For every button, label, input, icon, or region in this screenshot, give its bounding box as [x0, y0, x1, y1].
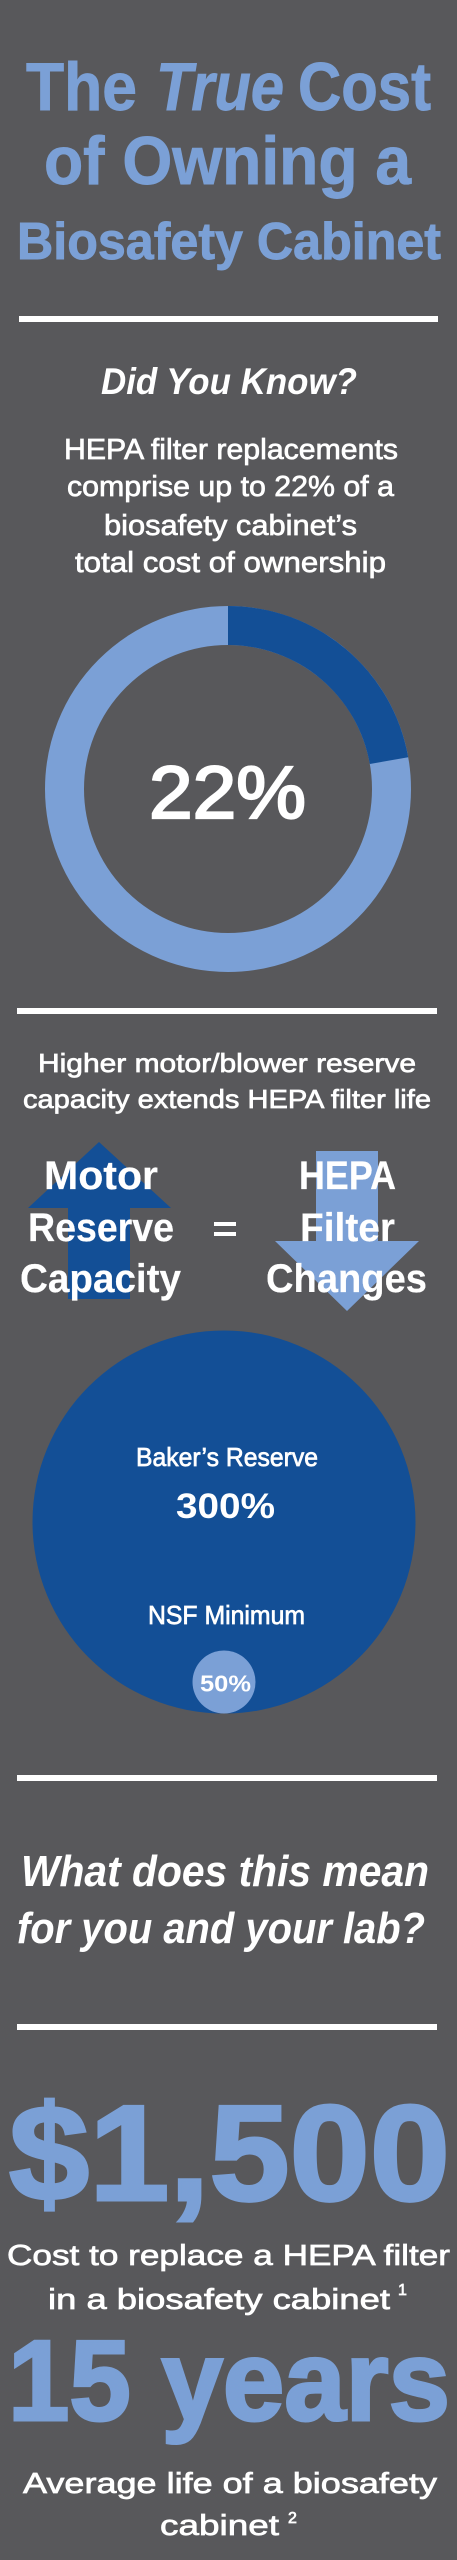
text block: filter cost	[7, 2240, 450, 2316]
small circle: 50%	[192, 1650, 256, 1714]
small circle: 50%: 50%	[200, 1670, 251, 1696]
value: 300%: 300%	[176, 1487, 275, 1526]
text block: cabinet life: Average life of a biosafety	[23, 2468, 438, 2500]
text block: HEPA filter share: HEPA filter replacements	[64, 434, 398, 466]
equals sign	[214, 1222, 236, 1236]
equation label: HEPA filter changes: Changes	[266, 1257, 427, 1301]
equation label: motor reserve capacity: Reserve	[28, 1206, 174, 1250]
text block: filter cost: 1	[398, 2282, 407, 2299]
title: True	[156, 49, 284, 125]
text block: reserve capacity	[23, 1048, 431, 1114]
equation label: HEPA filter changes: HEPA	[299, 1154, 396, 1198]
text block: reserve capacity: capacity extends HEPA filter life	[23, 1084, 431, 1114]
big number: 15 years: 15 years	[8, 2318, 450, 2445]
text block: HEPA filter share: biosafety cabinet’s	[104, 510, 357, 542]
title: Cost	[298, 49, 431, 125]
heading: what does this mean: for you and your lab?	[17, 1904, 425, 1953]
icon: down arrow	[275, 1151, 419, 1311]
title: Biosafety Cabinet	[17, 213, 441, 271]
big number: $1,500: $1,500	[9, 2077, 450, 2229]
text block: HEPA filter share: total cost of ownership	[75, 547, 386, 579]
title: of Owning a	[44, 123, 412, 199]
text block: HEPA filter share	[64, 434, 398, 579]
text block: filter cost: in a biosafety cabinet	[48, 2284, 390, 2316]
donut value: 22%	[149, 751, 306, 834]
proportional circle chart: reserve	[32, 1330, 416, 1714]
equation label: motor reserve capacity	[20, 1154, 182, 1301]
text block: HEPA filter share: comprise up to 22% of a	[67, 471, 395, 503]
text block: cabinet life	[23, 2468, 438, 2542]
donut chart: 22%	[64, 606, 408, 952]
text block: reserve capacity: Higher motor/blower reserve	[38, 1048, 416, 1078]
equation label: HEPA filter changes: Filter	[300, 1206, 395, 1250]
heading: did you know: Did You Know?	[101, 361, 357, 402]
title: The	[26, 49, 137, 125]
text block: cabinet life: 2	[288, 2510, 297, 2527]
label: Baker's Reserve: Baker’s Reserve	[136, 1442, 318, 1472]
icon: up arrow	[28, 1142, 171, 1299]
text block: filter cost: Cost to replace a HEPA filter	[7, 2240, 450, 2272]
text block: cabinet life: cabinet	[160, 2510, 279, 2542]
heading: what does this mean	[17, 1847, 429, 1953]
title	[17, 49, 441, 271]
label: NSF Minimum: NSF Minimum	[148, 1600, 305, 1630]
equation label: HEPA filter changes	[266, 1154, 427, 1301]
equation label: motor reserve capacity: Motor	[44, 1154, 158, 1198]
equation label: motor reserve capacity: Capacity	[20, 1257, 182, 1301]
heading: what does this mean: What does this mean	[21, 1847, 429, 1896]
